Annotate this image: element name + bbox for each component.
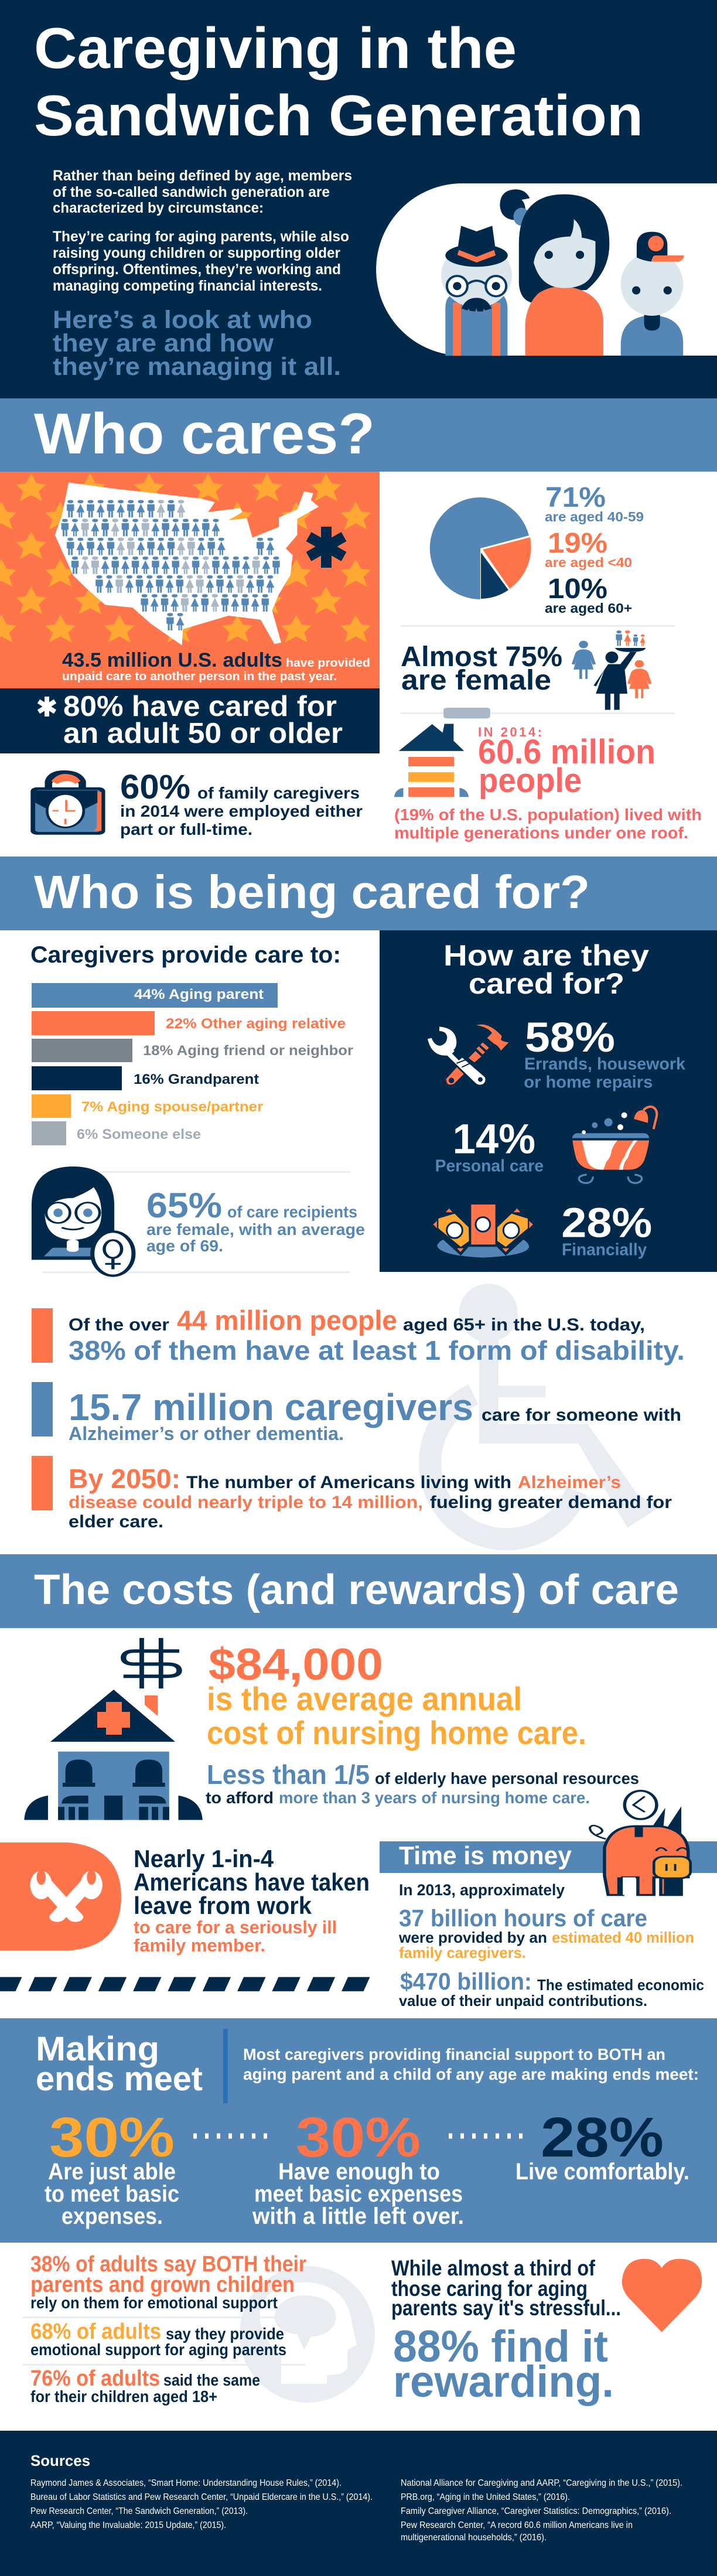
intro text: Rather than being defined by age, members: [53, 168, 352, 184]
text: 38 percent: [30, 2252, 306, 2312]
stat: 30 percent little left over: [252, 2106, 464, 2229]
text: 37 billion hours: family caregivers.: [399, 1944, 526, 1961]
stat: 14 percent personal care: [435, 1115, 544, 1175]
text: 470 billion: $470 billion:: [400, 1968, 532, 1995]
stat: 30 percent just able: expenses.: [62, 2203, 163, 2229]
intro text: of the so-called sandwich generation are: [53, 184, 330, 200]
panel: time is money: Time is money: [399, 1841, 572, 1870]
icon: grandfather: [441, 226, 512, 356]
stars background: [0, 473, 371, 643]
map of the united states: [55, 483, 319, 645]
stat: 28 percent comfortably: 28%: [541, 2106, 664, 2169]
text: less than one fifth: [206, 1759, 639, 1807]
text: 76 percent: for their children aged 18+: [30, 2387, 217, 2406]
text: 68 percent: 68% of adults: [30, 2319, 161, 2344]
panel: employed caregivers: [30, 768, 363, 838]
highlighted lead-in: they are and how: [53, 329, 274, 357]
panel: us map caregivers: [0, 472, 380, 688]
highlighted lead-in: [53, 306, 341, 381]
section heading: who cares: [0, 398, 717, 472]
panel: caregivers provide care to: [30, 942, 353, 1145]
icon: nursing home with dollar sign: [24, 1638, 203, 1820]
text: 38 percent: parents and grown children: [30, 2273, 295, 2297]
fact: 15.7 million caregivers: care for someone with: [482, 1405, 681, 1425]
fact: 44 million people: aged 65+ in the U.S. today,: [403, 1315, 645, 1335]
legend: age groups: [545, 482, 644, 616]
title: Caregiving in the: [34, 16, 517, 80]
heading: Making: [36, 2030, 159, 2068]
stat: 30 percent just able: Are just able: [48, 2159, 176, 2185]
stat: 14 percent personal care: Personal care: [435, 1156, 544, 1175]
stat: 28 percent comfortably: Live comfortably.: [515, 2159, 689, 2185]
stat: 58 percent errands: 58%: [525, 1014, 615, 1061]
intro text: raising young children or supporting older: [53, 245, 340, 261]
intro text: offspring. Oftentimes, they’re working and: [53, 261, 341, 278]
heading: cared for?: [469, 967, 624, 1000]
people grid: [61, 500, 282, 630]
stat: 88 percent rewarding: [393, 2322, 614, 2407]
stat: 65 percent: of care recipients: [227, 1203, 357, 1221]
panel: how are they cared for: [380, 930, 717, 1272]
stat: 30 percent little left over: meet basic expenses: [254, 2181, 463, 2207]
fact: 15.7 million caregivers: Alzheimer’s or other dementia.: [69, 1423, 344, 1444]
icon: money: [433, 1205, 533, 1258]
stat: 60.6 million people: (19% of the U.S. population) lived with: [394, 806, 702, 824]
panel: disability facts: [32, 1305, 685, 1531]
highlighted lead-in: they’re managing it all.: [53, 353, 341, 381]
fact: by 2050: disease could nearly triple to 14 million,: [69, 1493, 423, 1512]
panel: header: [0, 0, 717, 398]
icon: wrenches badge: [0, 1843, 121, 1951]
sources right column: multigenerational households,” (2016).: [401, 2533, 547, 2543]
text: 38 percent: rely on them for emotional support: [30, 2294, 278, 2312]
bar chart: [32, 983, 353, 1145]
panel: nursing home cost: [24, 1638, 639, 1820]
icon: child: [621, 232, 684, 356]
stat: 30 percent little left over: Have enough to: [278, 2159, 440, 2185]
stat: 60 percent employed: in 2014 were employed either: [120, 802, 363, 820]
heading: Sources: [30, 2452, 90, 2469]
text: less than one fifth: more than 3 years of nursing home care.: [279, 1789, 590, 1807]
caption: 43.5 million adults: 43.5 million U.S. adults: [62, 649, 282, 671]
intro text: characterized by circumstance:: [53, 200, 264, 216]
text: nearly 1 in 4: [134, 1845, 370, 1956]
panel: almost 75 percent female: Almost 75%: [401, 642, 562, 673]
text: 76 percent: 76% of adults: [30, 2366, 160, 2391]
legend: age groups: 71%: [545, 482, 606, 513]
stat: 30 percent just able: 30%: [49, 2106, 175, 2169]
stat: 65 percent: 65%: [146, 1186, 222, 1225]
text: 76 percent: [30, 2366, 260, 2406]
sources right column: PRB.org, “Aging in the United States,” (2016).: [401, 2492, 570, 2502]
stat: 60.6 million people: 60.6 million: [478, 733, 655, 771]
fact: 15.7 million caregivers: 15.7 million caregivers: [69, 1386, 473, 1428]
panel: almost 75 percent female: are female: [401, 665, 551, 696]
text: 37 billion hours: 37 billion hours of care: [399, 1905, 647, 1932]
text: nearly 1 in 4: Americans have taken: [134, 1868, 370, 1896]
icon: woman carrying family on tray: [572, 630, 651, 710]
caption: 43.5 million adults: [62, 649, 370, 683]
text: nearly 1 in 4: leave from work: [134, 1892, 312, 1919]
stat: 60.6 million people: multiple generations under one roof.: [394, 824, 688, 842]
intro text: [53, 168, 352, 294]
bar chart: 22% Other aging relative: [166, 1016, 346, 1032]
icon: briefcase with clock: [30, 770, 105, 835]
legend: age groups: 10%: [548, 574, 607, 605]
fact: by 2050: elder care.: [69, 1512, 163, 1531]
icon: wheelchair watermark: [430, 1284, 660, 1539]
sources left column: AARP, “Valuing the Invaluable: 2015 Update,” (2015).: [30, 2520, 226, 2530]
heading: [443, 939, 649, 1000]
stat: 84,000 dollars: cost of nursing home care.: [207, 1714, 586, 1751]
legend: age groups: are aged 40-59: [545, 509, 644, 524]
panel: emotional support: [23, 2252, 306, 2406]
text: stressful: While almost a third of: [391, 2256, 596, 2280]
intro sentence: aging parent and a child of any age are making ends meet:: [243, 2065, 699, 2083]
text: stressful: those caring for aging: [391, 2277, 588, 2301]
heading: How are they: [443, 939, 649, 972]
panel: multigenerational households: [394, 708, 702, 842]
text: 68 percent: [30, 2319, 286, 2359]
stat: 30 percent just able: to meet basic: [45, 2181, 179, 2207]
text: nearly 1 in 4: family member.: [134, 1935, 265, 1956]
icon: house stack: [394, 708, 490, 797]
intro sentence: Most caregivers providing financial support to BOTH an: [243, 2045, 665, 2063]
caption: 43.5 million adults: have provided: [286, 657, 370, 670]
text: 37 billion hours: [398, 1881, 694, 1961]
panel: rewarding: [391, 2256, 702, 2407]
panel: age pie chart: [430, 482, 644, 616]
stat: 14 percent personal care: 14%: [453, 1115, 535, 1162]
icon: head watermark: [240, 2266, 375, 2403]
text: 470 billion: value of their unpaid contributions.: [399, 1992, 647, 2009]
stat: 28 percent financially: 28%: [561, 1200, 652, 1247]
stat: 30 percent little left over: 30%: [296, 2106, 421, 2169]
panel: time is money: [380, 1791, 717, 2009]
title: Sandwich Generation: [34, 83, 643, 148]
stat: 84,000 dollars: [207, 1640, 586, 1751]
section heading: costs and rewards: [0, 1554, 717, 1628]
panel: leave from work: [0, 1843, 370, 1956]
stat: 84,000 dollars: $84,000: [209, 1640, 383, 1690]
bar chart: 7% Aging spouse/partner: [81, 1099, 263, 1115]
illustration: three generations: [376, 183, 717, 356]
stat: 28 percent financially: Financially: [562, 1241, 647, 1260]
stat: 60 percent employed: part or full-time.: [120, 820, 252, 838]
icon: asterisk: [309, 527, 344, 568]
icon: wrench and hammer: [428, 1025, 508, 1085]
panel: 80 percent callout: [0, 688, 380, 753]
fact: by 2050: [32, 1456, 672, 1531]
stat: 58 percent errands: or home repairs: [524, 1073, 653, 1091]
stat: 88 percent rewarding: 88% find it: [393, 2322, 608, 2372]
icon: small asterisk: [39, 697, 55, 716]
sources right column: National Alliance for Caregiving and AARP, “Caregiving in the U.S.,” (2015).: [401, 2478, 682, 2488]
stat: 58 percent errands: [524, 1014, 685, 1091]
fact: 15.7 million caregivers: [32, 1382, 681, 1444]
fact: by 2050: The number of Americans living with: [186, 1473, 511, 1492]
text: 37 billion hours: estimated 40 million: [552, 1929, 694, 1946]
text: less than one fifth: to afford: [206, 1789, 274, 1807]
text: 76 percent: said the same: [163, 2371, 260, 2389]
icon: bathtub: [572, 1107, 657, 1183]
panel: sources: [0, 2431, 717, 2576]
bar chart: 18% Aging friend or neighbor: [143, 1043, 353, 1059]
text: 470 billion: [399, 1968, 704, 2009]
icon: elderly woman with female symbol: [32, 1166, 134, 1276]
panel: care recipients: [32, 1166, 365, 1276]
stat: 60 percent employed: [120, 768, 363, 838]
heading: [36, 2030, 203, 2098]
fact: 44 million people: [32, 1305, 685, 1366]
icon: mother: [500, 189, 609, 356]
panel: 80 percent callout: 80% have cared for: [63, 691, 337, 722]
panel: making ends meet: [0, 2018, 717, 2243]
intro text: managing competing financial interests.: [53, 278, 322, 294]
fact: 44 million people: 38% of them have at least 1 form of disability.: [69, 1335, 685, 1366]
text: 68 percent: say they provide: [166, 2325, 284, 2343]
text: 68 percent: emotional support for aging parents: [30, 2340, 286, 2359]
fact: by 2050: fueling greater demand for: [430, 1493, 672, 1512]
intro text: They’re caring for aging parents, while also: [53, 228, 349, 245]
bar chart: 6% Someone else: [77, 1127, 201, 1142]
stat: 60 percent employed: 60%: [120, 768, 190, 806]
text: 37 billion hours: were provided by an: [398, 1929, 547, 1946]
pie chart: [430, 497, 531, 599]
stat: 60.6 million people: people: [479, 762, 582, 800]
text: stressful: [391, 2256, 621, 2320]
section heading: who cares: Who cares?: [34, 401, 375, 466]
title: [34, 16, 643, 148]
text: stressful: parents say it's stressful...: [391, 2296, 621, 2320]
bar chart: 16% Grandparent: [134, 1072, 259, 1087]
stat: 84,000 dollars: is the average annual: [207, 1680, 522, 1717]
text: less than one fifth: Less than 1/5: [207, 1759, 370, 1790]
legend: age groups: are aged 60+: [545, 601, 632, 616]
heading: ends meet: [36, 2060, 203, 2098]
text: nearly 1 in 4: Nearly 1-in-4: [134, 1845, 274, 1872]
fact: by 2050: By 2050:: [69, 1463, 180, 1494]
stat: 60.6 million people: [394, 725, 702, 842]
fact: 44 million people: Of the over: [69, 1315, 169, 1335]
stat: 65 percent: age of 69.: [146, 1237, 223, 1255]
caption: 43.5 million adults: unpaid care to another person in the past year.: [62, 670, 337, 683]
section heading: costs and rewards: The costs (and rewards) of care: [34, 1567, 679, 1613]
panel: almost 75 percent female: [401, 630, 651, 710]
section heading: who is being cared for: Who is being cared for?: [34, 866, 590, 918]
legend: age groups: 19%: [548, 528, 607, 559]
sources left column: Pew Research Center, “The Sandwich Generation,” (2013).: [30, 2506, 248, 2516]
stat: 28 percent comfortably: [515, 2106, 689, 2185]
icon: heart: [622, 2259, 702, 2332]
section heading: who is being cared for: [0, 857, 717, 930]
icon: piggy bank with clock: [590, 1791, 691, 1895]
stat: 30 percent just able: [45, 2106, 179, 2229]
stat: 65 percent: [146, 1186, 365, 1255]
sources left column: Raymond James & Associates, “Smart Home: Understanding House Rules,” (2014).: [30, 2478, 342, 2488]
panel: 80 percent callout: an adult 50 or older: [63, 718, 343, 749]
intro sentence: [243, 2045, 699, 2083]
stat: 65 percent: are female, with an average: [146, 1220, 365, 1238]
stat: 58 percent errands: Errands, housework: [524, 1055, 685, 1073]
text: 37 billion hours: In 2013, approximately: [399, 1881, 565, 1899]
sources right column: [401, 2478, 682, 2543]
sources right column: Family Caregiver Alliance, “Caregiver Statistics: Demographics,” (2016).: [401, 2506, 671, 2516]
text: 38 percent: 38% of adults say BOTH their: [30, 2252, 306, 2277]
text: nearly 1 in 4: to care for a seriously ill: [134, 1917, 337, 1937]
stat: 60 percent employed: of family caregivers: [197, 784, 360, 802]
fact: by 2050: Alzheimer’s: [518, 1473, 621, 1492]
fact: 44 million people: 44 million people: [177, 1305, 397, 1336]
stat: 88 percent rewarding: rewarding.: [393, 2357, 614, 2407]
sources left column: [30, 2478, 373, 2530]
sources right column: Pew Research Center, “A record 60.6 million Americans live in: [401, 2520, 633, 2530]
heading: Caregivers provide care to:: [30, 942, 341, 968]
text: less than one fifth: of elderly have personal resources: [375, 1769, 639, 1787]
stat: 60.6 million people: IN 2014:: [478, 725, 542, 739]
highlighted lead-in: Here’s a look at who: [53, 306, 312, 334]
stat: 30 percent little left over: with a little left over.: [252, 2203, 464, 2229]
legend: age groups: are aged <40: [545, 555, 632, 570]
sources left column: Bureau of Labor Statistics and Pew Research Center, “Unpaid Eldercare in the U.S.,” (2014).: [30, 2492, 373, 2502]
text: 470 billion: The estimated economic: [537, 1976, 704, 1994]
bar chart: 44% Aging parent: [134, 987, 264, 1002]
